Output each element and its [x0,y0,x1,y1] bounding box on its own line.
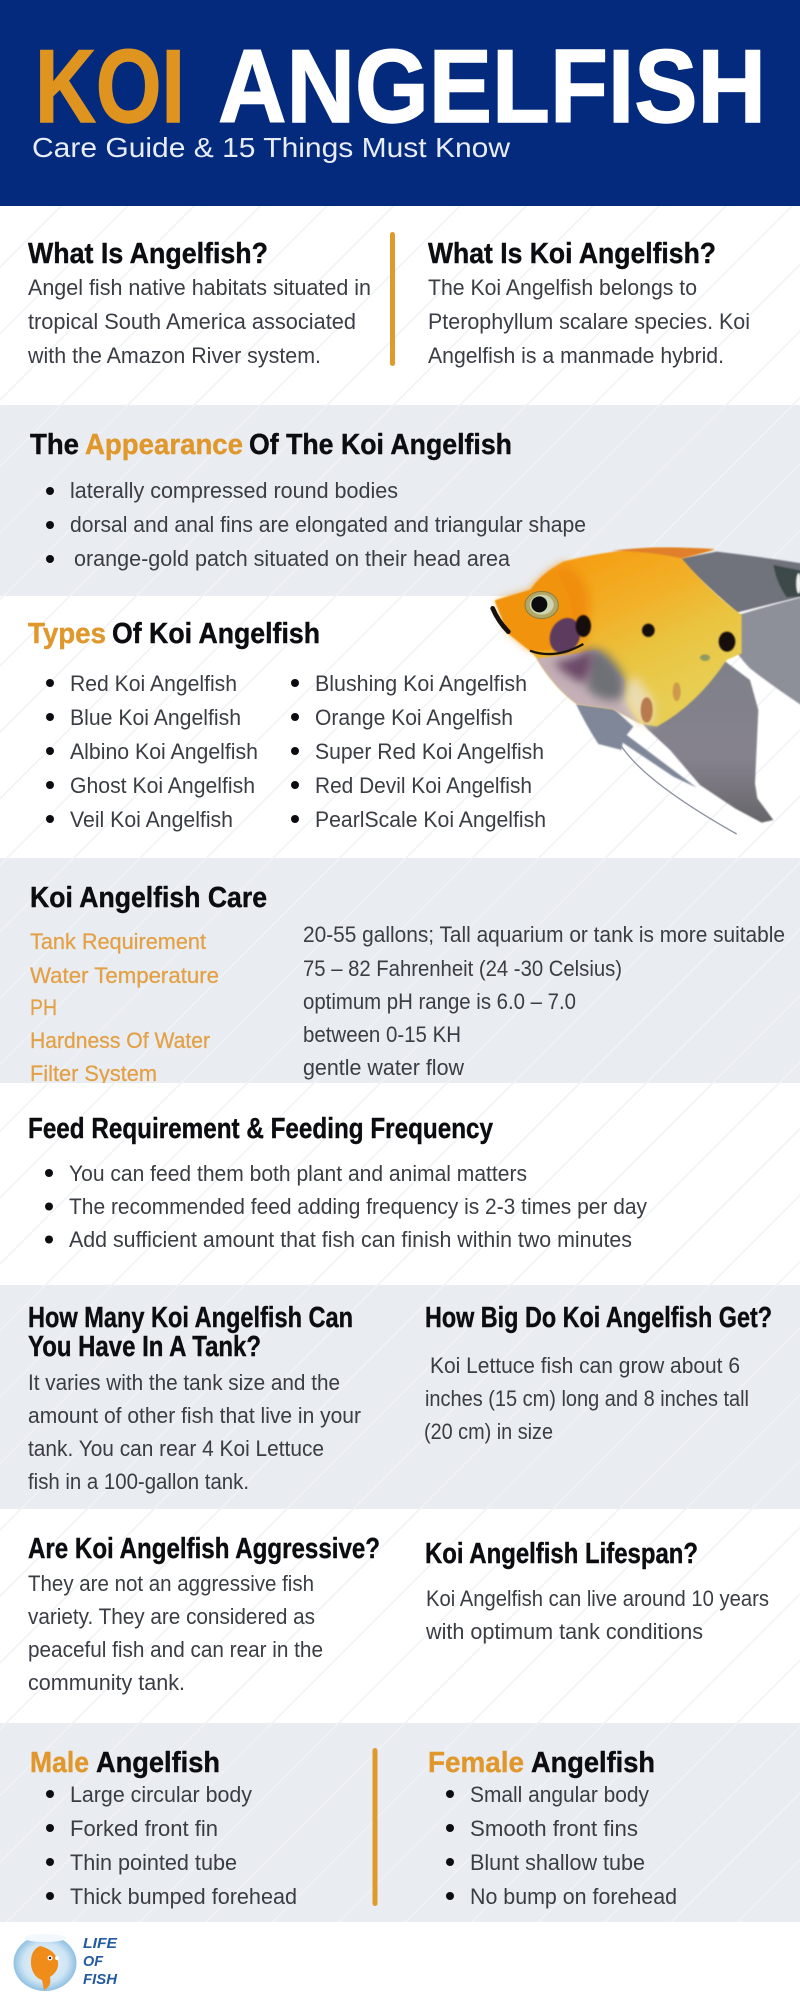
text: koi angelfish definition [428,275,750,368]
heading: female: Angelfish [531,1747,655,1779]
list: types right: Orange Koi Angelfish [315,705,513,730]
heading: what is angelfish: What Is Angelfish? [28,238,268,270]
heading: appearance: Of The Koi Angelfish [249,429,512,461]
heading: care: Koi Angelfish Care [30,882,267,914]
text: how many [28,1370,361,1494]
text: aggressive: They are not an aggressive fish [28,1571,314,1596]
list: female traits: No bump on forehead [470,1884,677,1909]
list: female traits: Smooth front fins [470,1816,638,1841]
list: female traits [446,1782,677,1909]
body spots [641,624,735,723]
panel: aggression and lifespan [0,1509,800,1723]
text: how many: amount of other fish that live in your [28,1403,361,1428]
text: koi angelfish definition: Angelfish is a manmade hybrid. [428,343,724,368]
text: koi angelfish definition: The Koi Angelfish belongs to [428,275,697,300]
list: feeding: The recommended feed adding frequency is 2-3 times per day [69,1194,648,1219]
list: appearance: dorsal and anal fins are elongated and triangular shape [70,512,586,537]
grey shoulder patch [587,649,624,700]
heading: male: Male [30,1747,89,1779]
logo wordmark: OF [83,1953,104,1970]
text: lifespan: with optimum tank conditions [425,1619,703,1644]
anal fin [640,660,773,823]
pale belly [537,650,640,723]
care parameter labels: Hardness Of Water [30,1028,210,1053]
list: types left: Albino Koi Angelfish [70,739,258,764]
care parameter labels [30,929,219,1086]
black gill spot [576,615,591,637]
divider bar [372,1748,378,1906]
list: types right [291,671,546,832]
text: angelfish habitat: tropical South America associated [28,309,356,334]
panel: care [0,858,800,1086]
panel: male and female [0,1723,800,1922]
logo wordmark: FISH [83,1971,118,1988]
list: types left: Red Koi Angelfish [70,671,237,696]
jaw line [530,644,583,654]
heading: lifespan: Koi Angelfish Lifespan? [425,1538,698,1570]
list: female traits: Small angular body [470,1782,650,1807]
list: male traits: Thin pointed tube [70,1850,237,1875]
text: aggressive: community tank. [28,1670,185,1695]
list: male traits: Thick bumped forehead [70,1884,297,1909]
divider bar [390,232,395,366]
heading: female [428,1747,655,1779]
heading: appearance [30,429,512,461]
care parameter values: 75 – 82 Fahrenheit (24 -30 Celsius) [303,956,622,981]
gill patch [544,613,586,658]
list: types left: Veil Koi Angelfish [70,807,233,832]
text: aggressive: peaceful fish and can rear in the [28,1637,323,1662]
care parameter labels: PH [30,995,57,1020]
subtitle: Care Guide & 15 Things Must Know [32,132,511,163]
illustration: koi angelfish [493,547,800,834]
list: male traits [46,1782,297,1909]
heading: male: Angelfish [96,1747,220,1779]
heading: types: Of Koi Angelfish [112,618,320,650]
heading: appearance: Appearance [85,429,243,461]
heading: aggressive: Are Koi Angelfish Aggressive? [28,1533,380,1565]
text: koi angelfish definition: Pterophyllum scalare species. Koi [428,309,750,334]
text: how many: It varies with the tank size and the [28,1370,340,1395]
text: how many: tank. You can rear 4 Koi Lettuce [28,1436,324,1461]
body silhouette with head and belly [495,548,742,727]
head solid [495,568,573,651]
logo wordmark: LIFE [83,1935,118,1952]
text: lifespan [425,1586,769,1644]
list: types left: Blue Koi Angelfish [70,705,241,730]
text: lifespan: Koi Angelfish can live around 10 years [426,1586,769,1611]
list: appearance: orange-gold patch situated on their head area [74,546,510,571]
panel: types [0,596,800,858]
tail fin [737,597,800,705]
mouth [493,608,508,632]
list: types left [46,671,258,832]
list: types right: Red Devil Koi Angelfish [315,773,532,798]
list: appearance [46,478,586,571]
text: aggressive: variety. They are considered as [28,1604,315,1629]
text: angelfish habitat: with the Amazon River system. [27,343,321,368]
cream belly [622,677,653,725]
heading: types: Types [28,618,106,650]
text: how big: inches (15 cm) long and 8 inches tall [425,1386,749,1411]
care parameter labels: Filter System [30,1061,157,1086]
care parameter values: gentle water flow [303,1055,465,1080]
panel: how many and how big [0,1285,800,1509]
eye [525,591,558,619]
list: male traits: Large circular body [70,1782,253,1807]
orange head wash [498,563,590,648]
heading: how many: You Have In A Tank? [28,1331,261,1363]
care parameter values: between 0-15 KH [303,1022,461,1047]
dorsal edge [612,547,715,558]
panel: appearance [0,405,800,596]
heading: female: Female [428,1747,524,1779]
care parameter labels: Water Temperature [30,963,219,988]
purple throat shade [553,648,592,683]
heading: what is koi angelfish: What Is Koi Angelfish? [428,238,716,270]
list: types right: Super Red Koi Angelfish [315,739,544,764]
list: male traits: Forked front fin [70,1816,218,1841]
care parameter values: optimum pH range is 6.0 – 7.0 [303,989,576,1014]
logo: life of fish [14,1934,118,1991]
text: aggressive [28,1571,323,1695]
text: how big: Koi Lettuce fish can grow about 6 [430,1353,740,1378]
panel: feeding [0,1083,800,1285]
text: angelfish habitat [27,275,371,368]
list: female traits: Blunt shallow tube [470,1850,645,1875]
heading: how many [28,1302,353,1363]
text: how big: (20 cm) in size [424,1419,553,1444]
list: types right: PearlScale Koi Angelfish [315,807,546,832]
care parameter values [303,922,785,1080]
panel: what is angelfish [0,206,800,405]
panel: header [0,0,800,206]
text: angelfish habitat: Angel fish native habitats situated in [28,275,371,300]
heading: how many: How Many Koi Angelfish Can [28,1302,353,1334]
list: types right: Blushing Koi Angelfish [315,671,527,696]
list: feeding: Add sufficient amount that fish can finish within two minutes [69,1227,632,1252]
text: how many: fish in a 100-gallon tank. [28,1469,249,1494]
list: feeding: You can feed them both plant and animal matters [69,1161,527,1186]
logo wordmark [83,1935,118,1988]
heading: appearance: The [30,429,79,461]
list: feeding [45,1161,648,1252]
text: how big [424,1353,749,1444]
heading: types [28,618,320,650]
title: KOI [35,29,185,145]
heading: feeding: Feed Requirement & Feeding Frequency [28,1113,493,1145]
list: appearance: laterally compressed round bodies [70,478,398,503]
heading: male [30,1747,220,1779]
ventral fin [576,704,737,834]
care parameter labels: Tank Requirement [30,929,206,954]
list: types left: Ghost Koi Angelfish [70,773,255,798]
icon: fish bowl [14,1934,76,1991]
dorsal fin [680,552,800,613]
